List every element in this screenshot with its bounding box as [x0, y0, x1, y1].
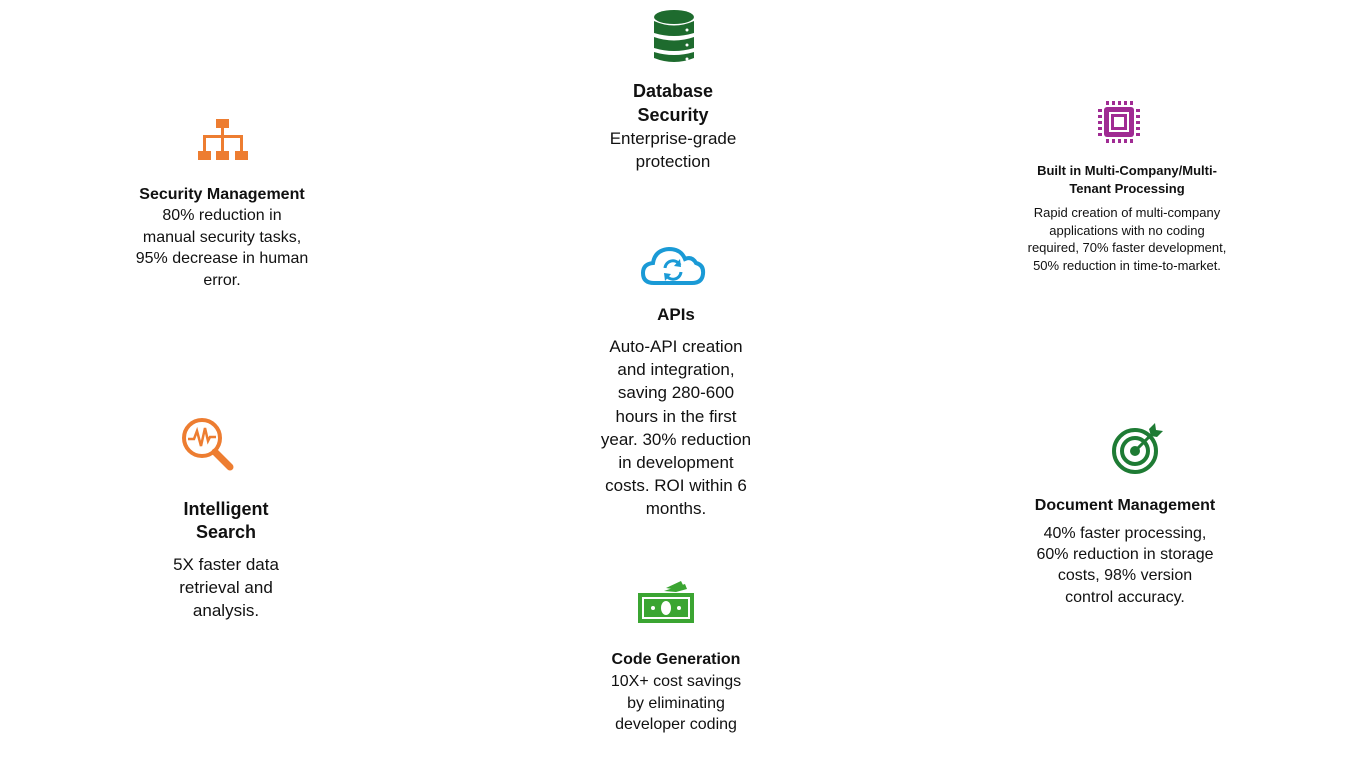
heading: APIs: [657, 305, 695, 324]
panel: security management: [136, 119, 308, 288]
heading: Tenant Processing: [1069, 181, 1185, 196]
text block: Enterprise-grade: [610, 129, 736, 148]
text block: [610, 129, 736, 171]
text block: control accuracy.: [1065, 589, 1185, 606]
heading: Security Management: [139, 186, 305, 203]
heading: Search: [196, 522, 256, 542]
text block: Auto-API creation: [609, 337, 743, 356]
icon: chip: [1098, 101, 1140, 143]
text block: protection: [636, 152, 710, 171]
text block: and integration,: [617, 360, 735, 379]
panel: APIs: [601, 247, 751, 518]
text block: costs. ROI within 6: [605, 476, 747, 495]
text block: developer coding: [615, 716, 737, 733]
panel: code generation: [611, 581, 741, 733]
text block: [1028, 205, 1226, 273]
text block: manual security tasks,: [143, 228, 301, 246]
text block: costs, 98% version: [1058, 567, 1192, 584]
text block: retrieval and: [179, 578, 273, 597]
text block: 40% faster processing,: [1044, 525, 1206, 542]
heading: Intelligent: [184, 499, 268, 519]
text block: 10X+ cost savings: [611, 673, 741, 690]
text block: in development: [618, 453, 734, 472]
text block: saving 280-600: [618, 383, 734, 402]
text block: 60% reduction in storage: [1036, 546, 1214, 563]
icon: target: [1112, 423, 1163, 474]
heading: Security: [637, 105, 709, 125]
text block: [136, 207, 308, 288]
text block: required, 70% faster development,: [1028, 240, 1226, 255]
heading: [1037, 163, 1217, 196]
icon: money: [638, 581, 694, 623]
icon: org chart: [198, 119, 248, 160]
text block: 80% reduction in: [162, 207, 282, 224]
text block: Rapid creation of multi-company: [1034, 205, 1220, 220]
text block: [173, 555, 279, 620]
panel: document management: [1035, 423, 1215, 606]
heading: Built in Multi-Company/Multi-: [1037, 163, 1217, 178]
heading: [184, 499, 268, 542]
panel: intelligent search: [173, 418, 279, 620]
text block: [611, 673, 741, 733]
heading: Database: [633, 81, 713, 101]
panel: database security: [610, 10, 736, 171]
text block: hours in the first: [616, 407, 736, 426]
text block: months.: [646, 499, 706, 518]
heading: [633, 81, 713, 125]
heading: Code Generation: [612, 651, 740, 668]
text block: [601, 337, 751, 518]
icon: database: [654, 10, 694, 62]
text block: [1036, 525, 1214, 606]
text block: 95% decrease in human: [136, 250, 308, 267]
panel: multi-tenant: [1028, 101, 1226, 273]
text block: by eliminating: [627, 694, 725, 712]
text block: year. 30% reduction: [601, 430, 751, 449]
text block: 5X faster data: [173, 555, 279, 574]
text block: applications with no coding: [1049, 223, 1205, 238]
icon: cloud sync: [641, 247, 706, 285]
text block: error.: [203, 272, 241, 288]
icon: magnifier: [182, 418, 234, 470]
heading: Document Management: [1035, 497, 1215, 514]
text block: 50% reduction in time-to-market.: [1033, 258, 1221, 273]
text block: analysis.: [193, 601, 259, 620]
